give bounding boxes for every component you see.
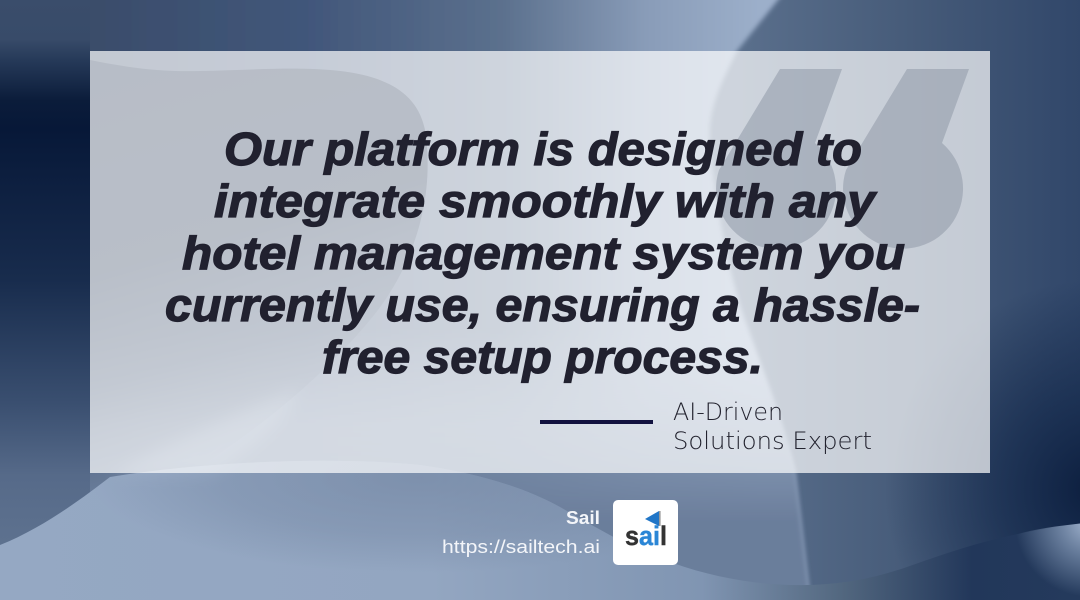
icon: large quotation mark: [716, 69, 969, 249]
footer brand text: Sail: [566, 508, 600, 528]
quote text: hotel management system you: [182, 227, 905, 279]
quote text: integrate smoothly with any: [214, 175, 878, 227]
attribution text: AI-Driven: [673, 398, 783, 426]
footer brand text: [442, 508, 600, 557]
quote panel: [90, 51, 990, 473]
quote text: free setup process.: [322, 331, 763, 383]
attribution text: Solutions Expert: [673, 427, 872, 455]
attribution rule: [540, 420, 653, 424]
attribution text: [673, 398, 872, 455]
quote text: [165, 123, 920, 383]
footer brand text: https://sailtech.ai: [442, 537, 600, 557]
logo: [613, 500, 678, 565]
icon: sail flag: [645, 511, 661, 526]
logo wordmark: sail: [625, 521, 667, 551]
quote text: currently use, ensuring a hassle-: [165, 279, 920, 331]
quote text: Our platform is designed to: [224, 123, 862, 175]
